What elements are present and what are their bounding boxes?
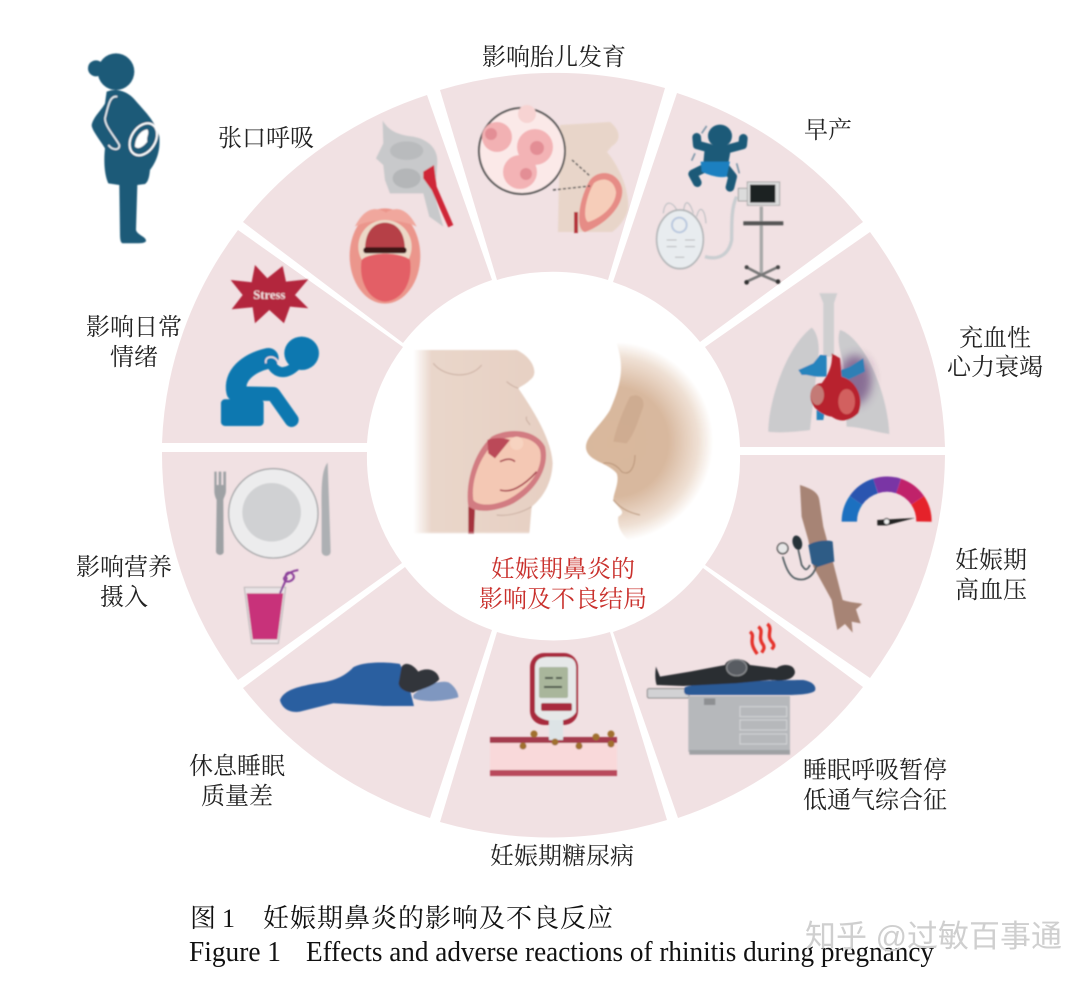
label: hypertension	[955, 547, 1027, 604]
icon: abdomen with magnified cells	[479, 105, 628, 233]
center title	[479, 556, 647, 613]
label: hypertension: 妊娠期	[955, 547, 1027, 574]
segment: mouth breathing	[243, 95, 492, 343]
label: daily mood	[86, 314, 182, 371]
segment: sleep apnea	[613, 568, 863, 818]
icon: distressed seated person	[221, 337, 319, 426]
panel: outcome wheel	[162, 73, 945, 837]
label: premature birth: 早产	[804, 117, 852, 144]
segment: hypertension	[705, 455, 945, 678]
icon: stress burst	[231, 265, 308, 323]
icon: pregnant woman silhouette	[88, 53, 163, 243]
segment: fetal development	[440, 73, 665, 280]
label: poor sleep: 质量差	[201, 783, 273, 810]
caption: English: Figure 1	[189, 937, 281, 968]
icon: glass of juice with straw	[244, 570, 298, 643]
segment: nutrition intake	[162, 452, 402, 680]
label: nutrition intake: 摄入	[100, 584, 148, 611]
caption: Chinese: 妊娠期鼻炎的影响及不良反应	[263, 904, 613, 933]
icon: head cross-section	[376, 121, 453, 227]
illustration: pregnant abdomen	[410, 350, 553, 537]
label: fetal development: 影响胎儿发育	[482, 44, 626, 71]
blood pressure gauge	[849, 484, 924, 522]
label: nutrition intake: 影响营养	[76, 554, 172, 581]
segment: heart failure	[705, 232, 945, 447]
label: sleep apnea: 低通气综合征	[803, 787, 947, 814]
magnified cells lens	[479, 105, 565, 194]
caption: Chinese: 图	[190, 904, 216, 933]
label: poor sleep	[189, 753, 285, 810]
label: sleep apnea	[803, 757, 947, 814]
label: heart failure: 充血性	[959, 325, 1031, 352]
label: sleep apnea: 睡眠呼吸暂停	[803, 757, 947, 784]
label: hypertension: 高血压	[955, 577, 1027, 604]
center title: 妊娠期鼻炎的	[491, 556, 635, 583]
icon: glucose meter on blood vessel	[490, 653, 617, 776]
label: poor sleep: 休息睡眠	[189, 753, 285, 780]
watermark: 知乎 @过敏百事通	[805, 919, 1062, 954]
label: gestational diabetes: 妊娠期糖尿病	[490, 843, 634, 870]
label: daily mood: 影响日常	[86, 314, 182, 341]
icon: baby and infant monitor	[657, 125, 783, 285]
icons layer	[88, 53, 924, 776]
icon: sleep study bed	[647, 624, 815, 755]
illustration: nose profile	[586, 343, 713, 542]
label: heart failure: 心力衰竭	[947, 354, 1043, 381]
segment: premature birth	[613, 93, 863, 342]
caption: Chinese: 1	[222, 904, 235, 933]
icon: open mouth	[350, 208, 420, 304]
center title: 影响及不良结局	[479, 586, 647, 613]
icon: stress burst: Stress	[253, 288, 285, 302]
caption: English: Effects and adverse reactions of rhinitis during pregnancy	[306, 937, 934, 968]
icon: blood pressure arm and gauge	[777, 484, 924, 633]
label: heart failure	[947, 325, 1043, 381]
label: nutrition intake	[76, 554, 172, 611]
icon: plate with fork and knife	[214, 463, 331, 558]
label: daily mood: 情绪	[110, 344, 158, 371]
icon: person sleeping under blanket	[280, 663, 458, 712]
label: mouth breathing: 张口呼吸	[218, 125, 314, 152]
segment: gestational diabetes	[440, 632, 667, 837]
segment: daily mood	[162, 230, 403, 443]
icon: lungs and heart	[768, 293, 889, 434]
segment: poor sleep	[243, 567, 492, 818]
